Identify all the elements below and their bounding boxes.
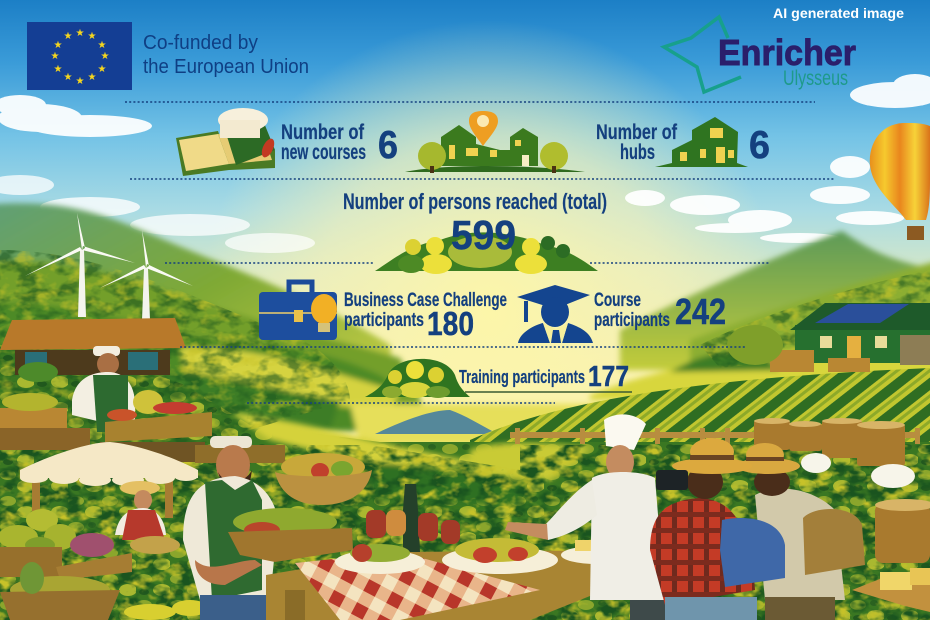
hubs label xyxy=(596,121,678,164)
icon: training group xyxy=(365,359,470,398)
icon: graduate xyxy=(517,285,593,343)
icon: briefcase with light bulb xyxy=(259,282,337,340)
EU flag: ★ xyxy=(76,76,85,87)
shelf behind farmer xyxy=(195,445,285,463)
plates of food xyxy=(335,538,633,574)
flowers near the farmer xyxy=(124,600,208,620)
vendor one xyxy=(72,346,135,432)
EU flag: ★ xyxy=(64,72,73,83)
icon: hub house xyxy=(655,117,748,167)
hubs label: hubs xyxy=(620,141,655,164)
new courses label xyxy=(281,121,366,164)
child vendor xyxy=(115,481,180,554)
photographer xyxy=(650,438,785,620)
market crates xyxy=(0,362,90,450)
painterly texture over foreground xyxy=(0,440,930,620)
new courses label: new courses xyxy=(281,141,366,164)
EU flag xyxy=(27,22,132,90)
course label: Course xyxy=(594,290,641,311)
hubs label: Number of xyxy=(596,121,678,144)
painterly texture over hills xyxy=(0,250,930,444)
business case label xyxy=(344,290,507,331)
EU flag: ★ xyxy=(64,31,73,42)
hubs number: 6 xyxy=(749,124,770,167)
course label xyxy=(594,290,670,331)
EU co-funded text: Co-funded by xyxy=(143,32,258,54)
fruit basket xyxy=(275,453,372,505)
parasol xyxy=(20,442,198,528)
EU co-funded text xyxy=(143,32,309,78)
EU flag: ★ xyxy=(76,28,85,39)
new courses label: Number of xyxy=(281,121,365,144)
market hut xyxy=(0,318,186,375)
barrels xyxy=(754,420,930,563)
wine glasses xyxy=(366,510,460,544)
vendor crate with produce xyxy=(100,390,212,462)
foreground foliage xyxy=(0,345,930,620)
AI generated label: AI generated image xyxy=(773,5,904,21)
course number: 242 xyxy=(675,291,726,332)
clouds xyxy=(0,74,930,253)
barrel tops xyxy=(754,418,930,511)
Enricher logo: Ulysseus xyxy=(783,67,848,90)
distant blue mountain xyxy=(375,410,498,434)
icon: recipe book with chef hat xyxy=(176,108,277,176)
new courses number: 6 xyxy=(378,124,398,167)
valley bands xyxy=(230,412,590,505)
farmhouse with solar panels xyxy=(727,303,930,372)
EU co-funded text: the European Union xyxy=(143,56,309,78)
dotted divider lines xyxy=(125,102,835,403)
fruit basket bottom left xyxy=(0,562,120,620)
EU flag: ★ xyxy=(101,51,110,62)
EU flag: ★ xyxy=(98,64,107,75)
second traveller xyxy=(736,443,865,620)
mountains and hills xyxy=(0,203,930,445)
crop field xyxy=(470,368,930,442)
course label: participants xyxy=(594,310,670,331)
EU flag: ★ xyxy=(88,31,97,42)
chef xyxy=(505,414,665,620)
farmer crate with produce xyxy=(228,508,353,562)
icon: village with location pin xyxy=(405,111,585,173)
farmer xyxy=(183,436,278,620)
wine bottle xyxy=(403,484,420,552)
training label: Training participants xyxy=(459,367,585,387)
underline xyxy=(465,391,632,393)
icon: crowd mound xyxy=(375,232,598,274)
EU flag: ★ xyxy=(54,40,63,51)
icon: wind turbines xyxy=(25,213,193,320)
persons reached heading: Number of persons reached (total) xyxy=(343,189,607,214)
business case label: Business Case Challenge xyxy=(344,290,507,311)
training number: 177 xyxy=(588,361,629,393)
fence xyxy=(510,428,920,444)
table xyxy=(266,550,645,620)
business case label: participants xyxy=(344,310,424,331)
chickens xyxy=(801,453,915,488)
persons reached number: 599 xyxy=(451,212,516,258)
EU flag: ★ xyxy=(54,64,63,75)
business case number: 180 xyxy=(427,305,474,342)
Enricher logo: Enricher xyxy=(718,32,856,73)
Enricher logo xyxy=(664,17,856,92)
cheese board xyxy=(852,568,930,612)
EU flag: ★ xyxy=(98,40,107,51)
EU flag: ★ xyxy=(88,72,97,83)
EU flag: ★ xyxy=(51,51,60,62)
vegetables and crate xyxy=(0,509,132,580)
icon: hot air balloon xyxy=(870,123,930,240)
